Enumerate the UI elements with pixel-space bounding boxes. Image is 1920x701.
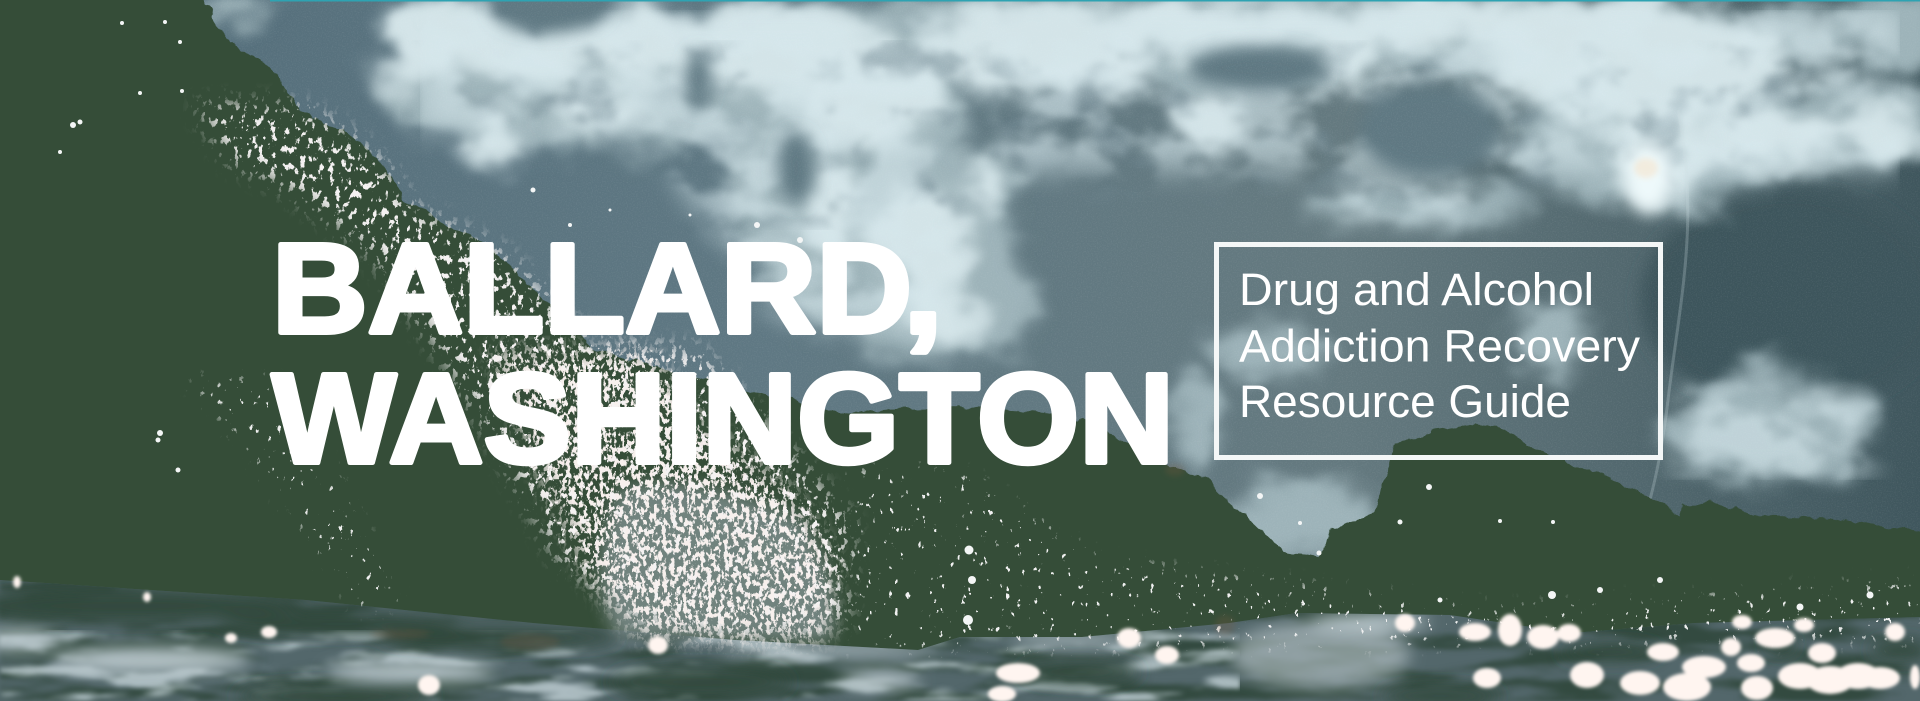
callout text: Drug and Alcohol (1239, 264, 1594, 315)
light water bands (0, 614, 1430, 689)
droplet streaks at left (190, 380, 400, 610)
bright cloud layer (365, 0, 1920, 350)
light noise wisps (420, 10, 1900, 480)
sun glints on the water (13, 576, 1920, 701)
callout text: Addiction Recovery (1239, 320, 1641, 372)
splash dense core (490, 350, 835, 640)
dark water streaks (0, 570, 1920, 701)
darker sky at far right (1640, 190, 1920, 410)
dark water patches (0, 590, 1920, 701)
dark noise breaking up the clouds (400, 40, 1860, 230)
top teal strip (270, 0, 1920, 2)
sea (0, 570, 1920, 701)
title (272, 218, 1174, 490)
splash luminous mass (601, 483, 834, 640)
flare glow (1624, 142, 1672, 214)
dark gaps in clouds (492, 0, 1500, 204)
clouds (199, 0, 1920, 560)
lens flare (1624, 142, 1672, 214)
callout box (1216, 244, 1660, 458)
title line 2: WASHINGTON (272, 348, 1174, 490)
mid-tone cloud layer (199, 0, 1920, 560)
callout text (1239, 264, 1641, 427)
callout border (1216, 244, 1660, 458)
splash speckle along the wave crest (196, 105, 850, 640)
light water streaks (0, 630, 1240, 701)
flare colour spot (1634, 158, 1658, 178)
callout text: Resource Guide (1239, 376, 1571, 427)
title comma: , (903, 218, 943, 360)
lens ring arc (1612, 110, 1688, 580)
title line 1: BALLARD (272, 218, 912, 360)
rust tints on the mountain edges (370, 464, 1235, 650)
droplets scattered over the silhouette (850, 470, 1920, 650)
